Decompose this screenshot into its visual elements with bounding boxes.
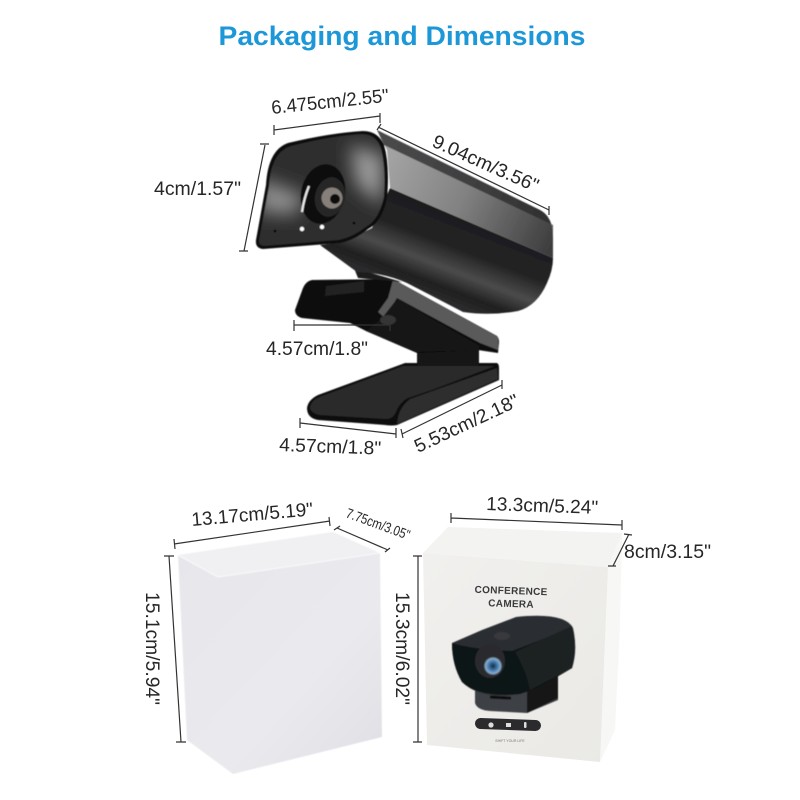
- webcam indicator lights: [274, 222, 355, 232]
- box dimension labels: 7.75cm/3.05": [344, 505, 412, 543]
- box dimension labels: 8cm/3.15": [624, 542, 711, 563]
- webcam dimension labels: 6.475cm/2.55": [270, 86, 390, 119]
- box dimension labels: 13.3cm/5.24": [486, 494, 598, 519]
- box heading: CAMERA: [488, 598, 534, 611]
- retail box: [423, 527, 622, 762]
- webcam neck: [354, 268, 402, 282]
- box camera image: [452, 616, 575, 713]
- box dimension labels: 13.17cm/5.19": [191, 499, 314, 531]
- plain white box: [178, 532, 382, 774]
- webcam dimension labels: 4cm/1.57": [154, 179, 241, 200]
- webcam dimension labels: 5.53cm/2.18": [411, 391, 523, 458]
- webcam front face: [256, 131, 388, 249]
- webcam hinge: [417, 345, 479, 366]
- box heading: CONFERENCE: [474, 585, 548, 598]
- webcam dimension labels: [154, 86, 542, 460]
- dimension lines: webcam: [239, 113, 549, 438]
- box icon bar: [475, 718, 541, 731]
- box heading: [474, 585, 548, 611]
- webcam upper clip arm: [295, 279, 499, 353]
- box dimension labels: 15.1cm/5.94": [141, 592, 162, 705]
- webcam product photo: [255, 130, 553, 426]
- dimension lines: boxes: [164, 513, 632, 742]
- webcam lens: [295, 160, 351, 228]
- title: Packaging and Dimensions: [218, 21, 586, 51]
- webcam base foot: [307, 363, 499, 426]
- box dimension labels: 15.3cm/6.02": [391, 592, 412, 705]
- webcam dimension labels: 4.57cm/1.8": [266, 339, 368, 360]
- webcam dimension labels: 9.04cm/3.56": [429, 131, 542, 197]
- box dimension labels: [141, 494, 711, 705]
- webcam body: [320, 130, 553, 314]
- box small print: SHIFT YOUR LIFE: [495, 739, 525, 743]
- webcam dimension labels: 4.57cm/1.8": [279, 435, 381, 460]
